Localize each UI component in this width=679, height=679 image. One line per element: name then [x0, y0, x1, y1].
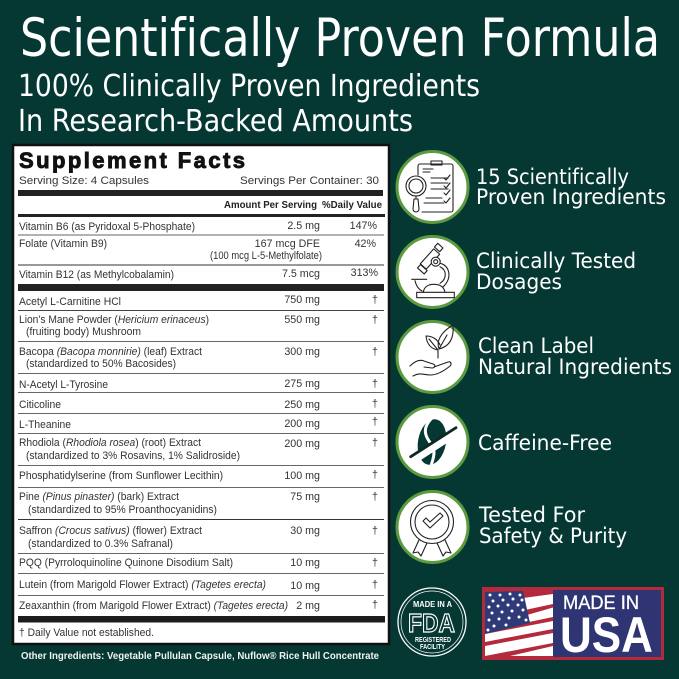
icon: hand holding plant [397, 322, 468, 392]
text: tested for safety and purity: Tested For [478, 503, 585, 528]
ingredient rows: † [372, 346, 378, 358]
ingredient rows: † [372, 491, 378, 503]
subtitle: 100% Clinically Proven Ingredients [18, 69, 480, 104]
ingredient rows: † [372, 294, 378, 306]
vitamin rows [18, 220, 384, 281]
ingredient rows: † [372, 437, 378, 449]
ingredient rows: † [372, 378, 378, 390]
subtitle: In Research-Backed Amounts [18, 104, 413, 139]
ingredient rows: Pine (Pinus pinaster) (bark) Extract [19, 491, 179, 503]
ingredient rows: † [372, 599, 378, 611]
ingredient rows: 300 mg [284, 346, 320, 358]
ingredient rows: 200 mg [284, 438, 320, 450]
heading: supplement facts: Supplement Facts [19, 148, 245, 173]
vitamin rows: 7.5 mcg [282, 268, 320, 280]
ingredient rows: Lutein (from Marigold Flower Extract) (Tagetes erecta) [19, 579, 266, 591]
icon: microscope [397, 236, 468, 308]
icon: clipboard with magnifier [397, 152, 468, 222]
badge: made in a FDA registered facility: MADE IN A [413, 600, 452, 609]
badge: made in a FDA registered facility [398, 588, 466, 656]
text: clean label natural ingredients [478, 334, 672, 380]
other ingredients: Other Ingredients: Vegetable Pullulan Capsule, Nuflow® Rice Hull Concentrate [21, 651, 380, 662]
text: clinically tested dosages: Dosages [476, 270, 562, 295]
ingredient rows: Phosphatidylserine (from Sunflower Lecithin) [19, 470, 223, 482]
badge: made in USA flag: USA [560, 607, 653, 663]
ingredient rows: PQQ (Pyrroloquinoline Quinone Disodium Salt) [19, 557, 233, 569]
text: clean label natural ingredients: Clean Label [478, 334, 594, 359]
badge: made in USA flag: MADE IN [563, 593, 639, 614]
ingredient rows: 100 mg [284, 470, 320, 482]
icon: crossed-out coffee bean [397, 406, 468, 478]
ingredient rows: L-Theanine [19, 419, 71, 431]
text: tested for safety and purity [478, 503, 627, 549]
column headers: %Daily Value [322, 200, 382, 211]
ingredient rows: 200 mg [284, 418, 320, 430]
ingredient rows: (standardized to 50% Bacosides) [26, 358, 176, 370]
vitamin rows: 313% [351, 267, 378, 279]
badge: made in a FDA registered facility: FDA [408, 608, 455, 638]
ingredient rows [18, 294, 384, 612]
ingredient rows: † [372, 579, 378, 591]
ingredient rows: † [372, 416, 378, 428]
ingredient rows: 10 mg [290, 580, 320, 592]
vitamin rows: Folate (Vitamin B9) [19, 238, 107, 250]
ingredient rows: 2 mg [296, 600, 320, 612]
ingredient rows: 30 mg [290, 525, 320, 537]
text: caffeine-free: Caffeine-Free [478, 431, 612, 456]
ingredient rows: † [372, 314, 378, 326]
vitamin rows: Vitamin B12 (as Methylcobalamin) [19, 269, 174, 281]
icon: american flag [485, 591, 553, 656]
badge: made in USA flag [482, 587, 664, 663]
ingredient rows: † [372, 469, 378, 481]
serving information [19, 175, 379, 187]
text: clinically tested dosages [476, 249, 636, 295]
ingredient rows: † [372, 525, 378, 537]
text: 15 scientifically proven ingredients: 15 Scientifically [476, 165, 629, 190]
ingredient rows: Acetyl L-Carnitine HCl [19, 296, 121, 308]
badge: made in a FDA registered facility: FACILITY [420, 644, 445, 651]
ingredient rows: Saffron (Crocus sativus) (flower) Extract [19, 525, 202, 537]
footnote: † Daily Value not established. [19, 627, 154, 639]
ingredient rows: 10 mg [290, 557, 320, 569]
serving information: Servings Per Container: 30 [240, 175, 379, 187]
text: clinically tested dosages: Clinically Tested [476, 249, 636, 274]
serving information: Serving Size: 4 Capsules [19, 175, 149, 187]
ingredient rows: 750 mg [284, 294, 320, 306]
ingredient rows: 75 mg [290, 491, 320, 503]
vitamin rows: 167 mcg DFE [255, 238, 320, 250]
badge: made in a FDA registered facility: REGISTERED [415, 637, 451, 644]
vitamin rows: 42% [355, 238, 376, 250]
column headers: Amount Per Serving [224, 200, 317, 211]
vitamin rows: Vitamin B6 (as Pyridoxal 5-Phosphate) [19, 221, 195, 233]
vitamin rows: (100 mcg L-5-Methylfolate) [210, 250, 322, 262]
text: 15 scientifically proven ingredients: Proven Ingredients [476, 185, 666, 210]
ingredient rows: 250 mg [284, 399, 320, 411]
subtitle [18, 69, 480, 139]
ingredient rows: Zeaxanthin (from Marigold Flower Extract) (Tagetes erecta) [19, 600, 288, 612]
icon: safety badge [397, 492, 468, 562]
ingredient rows: Rhodiola (Rhodiola rosea) (root) Extract [19, 437, 201, 449]
ingredient rows: (fruiting body) Mushroom [26, 326, 141, 338]
ingredient rows: 550 mg [284, 314, 320, 326]
vitamin rows: 147% [350, 220, 377, 232]
text: 15 scientifically proven ingredients [476, 165, 666, 210]
ingredient rows: † [372, 557, 378, 569]
ingredient rows: † [372, 398, 378, 410]
ingredient rows: (standardized to 95% Proanthocyanidins) [28, 504, 217, 516]
ingredient rows: Citicoline [19, 399, 61, 411]
ingredient rows: (standardized to 3% Rosavins, 1% Salidroside) [26, 450, 240, 462]
ingredient rows: 275 mg [284, 378, 320, 390]
vitamin rows: 2.5 mg [287, 220, 320, 232]
panel: supplement facts [13, 145, 389, 644]
ingredient rows: N-Acetyl L-Tyrosine [19, 379, 108, 391]
column headers [224, 200, 382, 211]
ingredient rows: (standardized to 0.3% Safranal) [28, 538, 173, 550]
ingredient rows: Bacopa (Bacopa monnirie) (leaf) Extract [19, 346, 202, 358]
text: tested for safety and purity: Safety & Purity [479, 524, 627, 549]
ingredient rows: Lion's Mane Powder (Hericium erinaceus) [19, 314, 209, 326]
